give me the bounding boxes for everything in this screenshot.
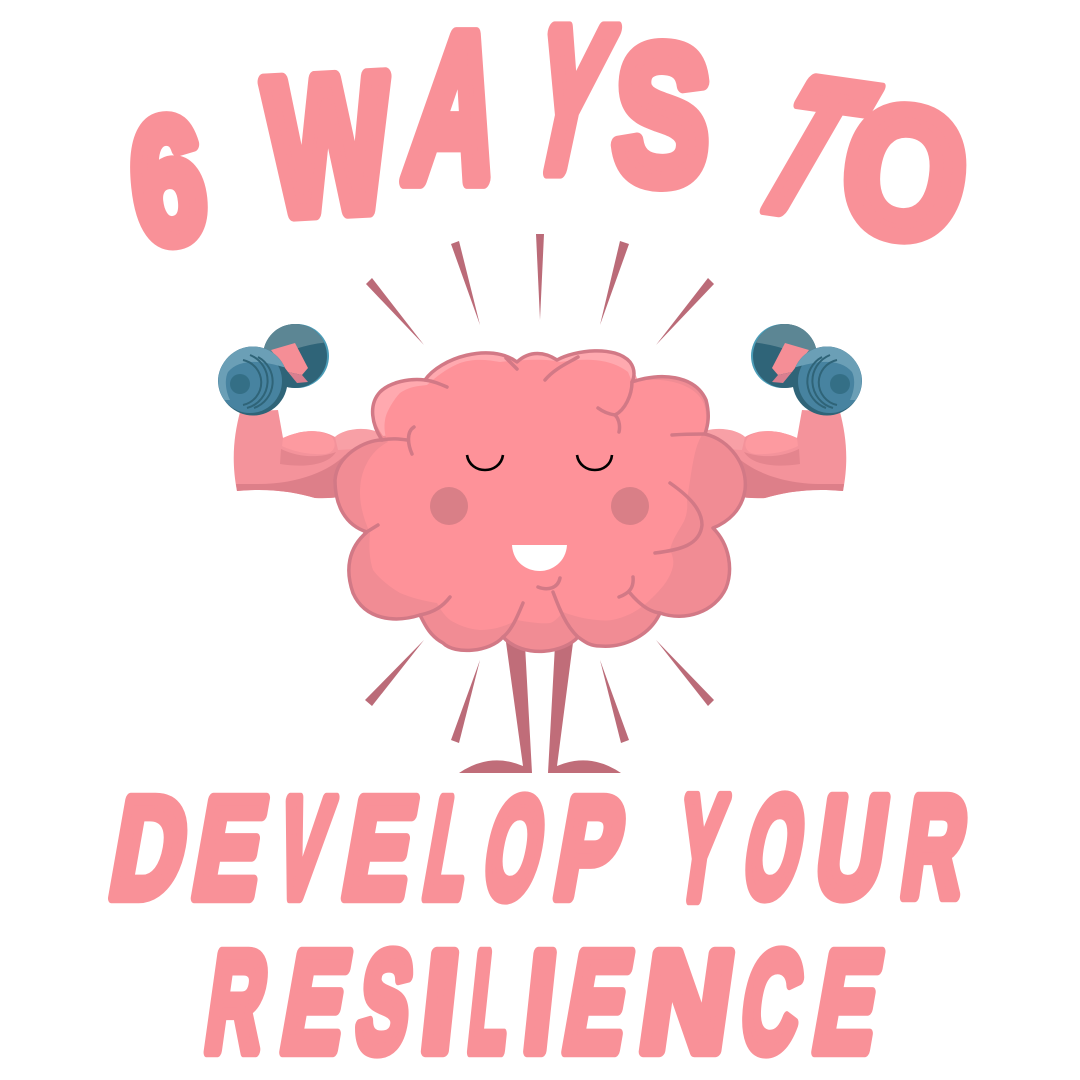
- subtitle: resilience: N: [632, 923, 742, 1080]
- dumbbell front plate: [218, 346, 287, 416]
- eyes: [467, 455, 612, 470]
- subtitle: develop your: R: [894, 767, 976, 926]
- left arm with dumbbell: [218, 324, 379, 498]
- hand: [271, 343, 308, 383]
- lighter top rim: [374, 351, 640, 436]
- subtitle: resilience: I: [518, 923, 562, 1080]
- title: 6 ways to: 6: [122, 79, 214, 282]
- dumbbell back plate: [264, 324, 329, 388]
- title: 6 ways to: [122, 0, 979, 282]
- cheeks: [430, 487, 649, 525]
- brain fold lines: [365, 357, 705, 637]
- subtitle: resilience: E: [554, 923, 642, 1080]
- title: 6 ways to: T: [718, 44, 901, 251]
- rays around brain: [365, 234, 714, 743]
- subtitle: resilience: E: [272, 923, 360, 1080]
- subtitle: resilience: S: [348, 923, 421, 1080]
- subtitle: resilience: R: [198, 924, 276, 1080]
- brain outline: [335, 351, 745, 651]
- subtitle: develop your: O: [474, 769, 556, 928]
- title: 6 ways to: W: [261, 35, 395, 255]
- subtitle: develop your: P: [545, 769, 635, 927]
- mouth: [512, 545, 567, 571]
- subtitle: develop your: E: [183, 769, 277, 928]
- subtitle: develop your: D: [101, 769, 199, 928]
- subtitle: develop your: O: [734, 768, 816, 927]
- legs and feet: [459, 635, 621, 773]
- subtitle: develop your: Y: [667, 767, 734, 931]
- title: 6 ways to: S: [609, 5, 715, 225]
- arm: [234, 410, 390, 498]
- subtitle: resilience: [198, 923, 892, 1080]
- right arm with dumbbell: [707, 324, 862, 498]
- subtitle: resilience: E: [804, 923, 892, 1080]
- subtitle: resilience: L: [462, 923, 517, 1080]
- title: 6 ways to: O: [831, 65, 979, 281]
- subtitle: develop your: V: [266, 770, 342, 928]
- subtitle: develop your: [101, 767, 976, 931]
- subtitle: develop your: U: [808, 767, 896, 926]
- subtitle: resilience: I: [415, 923, 465, 1080]
- brain face area: [360, 360, 706, 630]
- subtitle: develop your: E: [333, 769, 427, 928]
- subtitle: develop your: L: [415, 768, 483, 927]
- subtitle: resilience: C: [733, 924, 811, 1080]
- brain silhouette: [335, 351, 745, 651]
- brain: [335, 351, 745, 651]
